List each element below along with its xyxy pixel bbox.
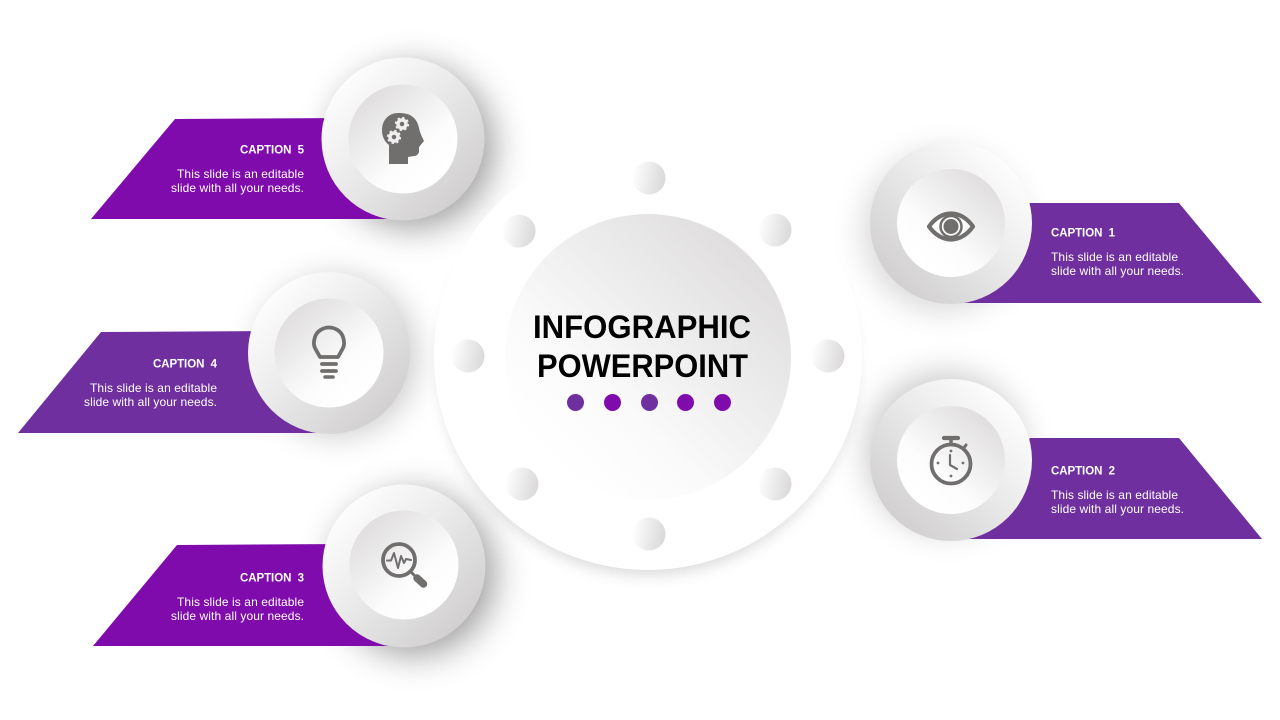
orbit dots	[452, 162, 844, 550]
ring	[322, 58, 484, 220]
caption heading: CAPTION 4	[153, 358, 218, 370]
title: POWERPOINT	[537, 348, 748, 384]
caption text: slide with all your needs.	[1051, 502, 1184, 516]
caption text: slide with all your needs.	[1051, 264, 1184, 278]
caption heading: CAPTION 1	[1051, 228, 1116, 240]
panel: caption 1	[870, 142, 1262, 304]
caption text: slide with all your needs.	[171, 181, 304, 195]
icon: stopwatch	[932, 438, 970, 484]
icon: magnifier with pulse	[383, 544, 424, 584]
banner	[91, 118, 400, 219]
panel: caption 4	[18, 272, 410, 434]
caption text: This slide is an editable	[177, 167, 304, 181]
title: INFOGRAPHIC	[533, 309, 751, 345]
caption heading: CAPTION 2	[1051, 466, 1115, 478]
inner gradient disc	[505, 214, 791, 500]
banner	[960, 438, 1262, 539]
purple dots row	[567, 394, 731, 411]
caption heading: CAPTION 3	[240, 572, 304, 584]
caption text: This slide is an editable	[177, 595, 304, 609]
caption text: This slide is an editable	[90, 381, 217, 395]
banner	[93, 544, 400, 646]
icon: head with gears	[382, 113, 424, 164]
ring	[870, 379, 1032, 541]
ring	[248, 272, 410, 434]
outer white disc	[434, 142, 862, 570]
ring shadows	[249, 58, 1031, 647]
icon: eye	[929, 214, 973, 240]
icon: light bulb	[314, 328, 344, 377]
disc shadow	[441, 160, 855, 574]
caption heading: CAPTION 5	[240, 144, 305, 156]
panel: caption 2	[870, 379, 1262, 541]
panel: caption 3	[93, 484, 486, 648]
caption text: slide with all your needs.	[171, 609, 304, 623]
ring	[870, 142, 1032, 304]
panel: caption 5	[91, 58, 484, 220]
caption text: This slide is an editable	[1051, 488, 1178, 502]
central hub	[434, 142, 862, 574]
caption text: slide with all your needs.	[84, 395, 217, 409]
banner	[18, 331, 330, 433]
banner	[960, 203, 1262, 303]
caption text: This slide is an editable	[1051, 250, 1178, 264]
ring	[322, 484, 486, 648]
